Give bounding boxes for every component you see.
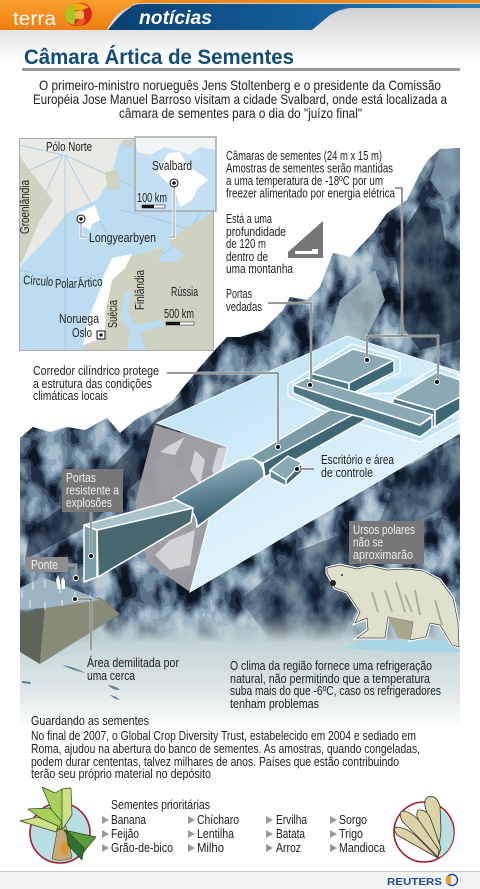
intro text: câmara de sementes para o dia do "juízo final"	[119, 105, 362, 121]
seed list: Banana	[111, 813, 146, 827]
annotation: depth: de 120 m	[226, 237, 266, 251]
annotation: depth: uma montanha	[226, 262, 293, 276]
callout: polar bears	[349, 521, 424, 564]
Svalbard inset	[135, 137, 216, 211]
blue notícias tab	[108, 4, 480, 30]
Svalbard on map	[78, 205, 100, 230]
Norway	[83, 254, 132, 345]
map labels: Oslo	[72, 326, 92, 340]
mountain scene	[20, 148, 460, 728]
annotation: depth: profundidade	[226, 225, 286, 239]
ice floe	[345, 640, 460, 652]
intro text	[33, 77, 447, 121]
scale bars	[142, 205, 194, 325]
Scandinavia and Russia	[83, 212, 213, 350]
annotation: cylindrical corridor: climáticas locais	[33, 389, 108, 403]
map labels: 500 km	[164, 307, 194, 321]
seed list	[102, 798, 385, 855]
leader dots	[72, 358, 440, 602]
annotation: climate	[230, 659, 441, 711]
location markers	[77, 179, 178, 223]
annotation: office: de controle	[321, 466, 373, 480]
seed list: Sementes prioritárias	[111, 798, 210, 812]
seed list: Ervilha	[276, 813, 307, 827]
facility halo outline	[288, 344, 460, 442]
annotation: fenced area: uma cerca	[87, 669, 135, 683]
callout: polar bears: Ursos polares	[353, 523, 415, 537]
map labels: Rússia	[171, 285, 198, 299]
lower right dark mass	[240, 440, 460, 640]
map labels: Pólo Norte	[46, 140, 92, 154]
dark diagonal band left	[25, 380, 200, 560]
section: guarding the seeds: podem durar cententas, talvez milhares de anos. Países que estão contribuindo	[31, 755, 399, 769]
office and control area	[270, 456, 302, 486]
callout: blast doors	[62, 469, 123, 512]
callout: bridge: Ponte	[31, 558, 58, 572]
section: guarding the seeds	[31, 714, 420, 781]
notícias wordmark: notícias	[139, 8, 212, 29]
footer	[0, 871, 480, 889]
page header band	[0, 0, 480, 60]
left seed chamber	[310, 349, 394, 395]
callout: polar bears: aproximarão	[353, 548, 413, 562]
annotation: depth	[226, 212, 293, 276]
terra logo	[65, 3, 92, 26]
map labels: Longyearbyen	[89, 231, 156, 245]
annotation: cylindrical corridor	[33, 364, 159, 403]
seed list: Grão-de-bico	[111, 841, 173, 855]
title: Câmara Ártica de Sementes	[24, 46, 294, 69]
map leaders	[81, 183, 174, 237]
map labels: 100 km	[137, 191, 167, 205]
annotation: seed chambers: Amostras de sementes serão mantidas	[226, 162, 393, 176]
annotation: climate: O clima da região fornece uma refrigeração	[230, 659, 432, 673]
annotation: seed chambers: Câmaras de sementes (24 m x 15 m)	[226, 149, 382, 163]
seed list: Batata	[276, 827, 305, 841]
seed vault facility	[84, 349, 460, 582]
annotation: seed chambers: freezer alimentado por energia elétrica	[226, 186, 395, 200]
ice slab	[157, 336, 460, 592]
annotation: office	[321, 453, 394, 480]
depth icon	[288, 221, 323, 258]
seed list: Trigo	[339, 827, 363, 841]
leader lines	[68, 188, 438, 650]
map of the Arctic	[18, 137, 216, 350]
Reuters logo	[387, 874, 458, 888]
Baltic sea	[120, 290, 165, 350]
annotation: seed chambers: a uma temperatura de -18ºC por um	[226, 174, 383, 188]
annotation: office: Escritório e área	[321, 453, 394, 467]
long access corridor	[248, 408, 365, 477]
annotation: cylindrical corridor: Corredor cilíndrico protege	[33, 364, 159, 378]
callout: blast doors: resistente a	[66, 484, 119, 498]
seed list: Mandioca	[339, 841, 385, 855]
annotation: seed chambers	[226, 149, 395, 200]
icon: banana tree	[20, 787, 96, 863]
seed list: Milho	[197, 841, 224, 855]
dark rock mass on right peak	[395, 205, 460, 350]
map labels: Groenlândia	[18, 180, 32, 234]
annotation: sealed doors: Portas	[226, 287, 252, 301]
Reuters logo: REUTERS	[387, 876, 442, 888]
annotation: sealed doors	[226, 287, 262, 314]
map labels: Ártico	[77, 273, 103, 291]
Oslo marker	[97, 331, 105, 339]
map labels	[18, 140, 198, 340]
map labels: Svalbard	[152, 159, 192, 173]
orange terra tab	[0, 0, 142, 30]
fenced platform and wall	[20, 575, 120, 664]
cylindrical corridor	[173, 458, 264, 527]
annotation: depth: Está a uma	[226, 212, 272, 226]
section: guarding the seeds: Guardando as sementes	[31, 714, 149, 728]
seed list: Arroz	[276, 841, 301, 855]
section: guarding the seeds: terão seu próprio material no depósito	[31, 767, 211, 781]
annotation: depth: dentro de	[226, 250, 268, 264]
graticule	[19, 145, 213, 350]
sea ice	[19, 138, 135, 270]
map labels: Finlândia	[133, 270, 147, 310]
polar bear	[327, 565, 460, 652]
map labels: Polar	[55, 277, 77, 291]
callout: blast doors: Portas	[66, 471, 96, 485]
seed list: Chícharo	[197, 813, 239, 827]
snow streaks	[22, 665, 120, 700]
annotation: climate: tenham problemas	[230, 697, 319, 711]
annotation: fenced area: Área demilitada por	[87, 655, 179, 670]
blast door block	[84, 500, 193, 582]
annotation: fenced area	[87, 655, 179, 683]
callout: blast doors: explosões	[66, 496, 112, 510]
icon: wheat	[394, 796, 454, 862]
map labels: Suécia	[106, 300, 120, 328]
map labels: Círculo	[23, 273, 54, 289]
list bullets	[102, 816, 337, 852]
Greenland	[19, 157, 53, 265]
map labels: Noruega	[59, 312, 99, 326]
seed list: Feijão	[111, 827, 139, 841]
callout: polar bears: não se	[353, 536, 383, 550]
cross corridor	[293, 378, 433, 437]
seed list: Lentilha	[197, 827, 234, 841]
seed list: Sorgo	[339, 813, 367, 827]
annotation: cylindrical corridor: a estrutura das condições	[33, 377, 152, 391]
terra wordmark: terra	[13, 9, 56, 30]
cross-section of the mountain	[135, 425, 228, 592]
northern islands	[105, 140, 134, 190]
snow ground fade	[20, 610, 460, 728]
annotation: sealed doors: vedadas	[226, 300, 262, 314]
right seed chamber	[393, 372, 460, 427]
annotation: climate: natural, não permitindo que a temperatura	[230, 672, 430, 686]
